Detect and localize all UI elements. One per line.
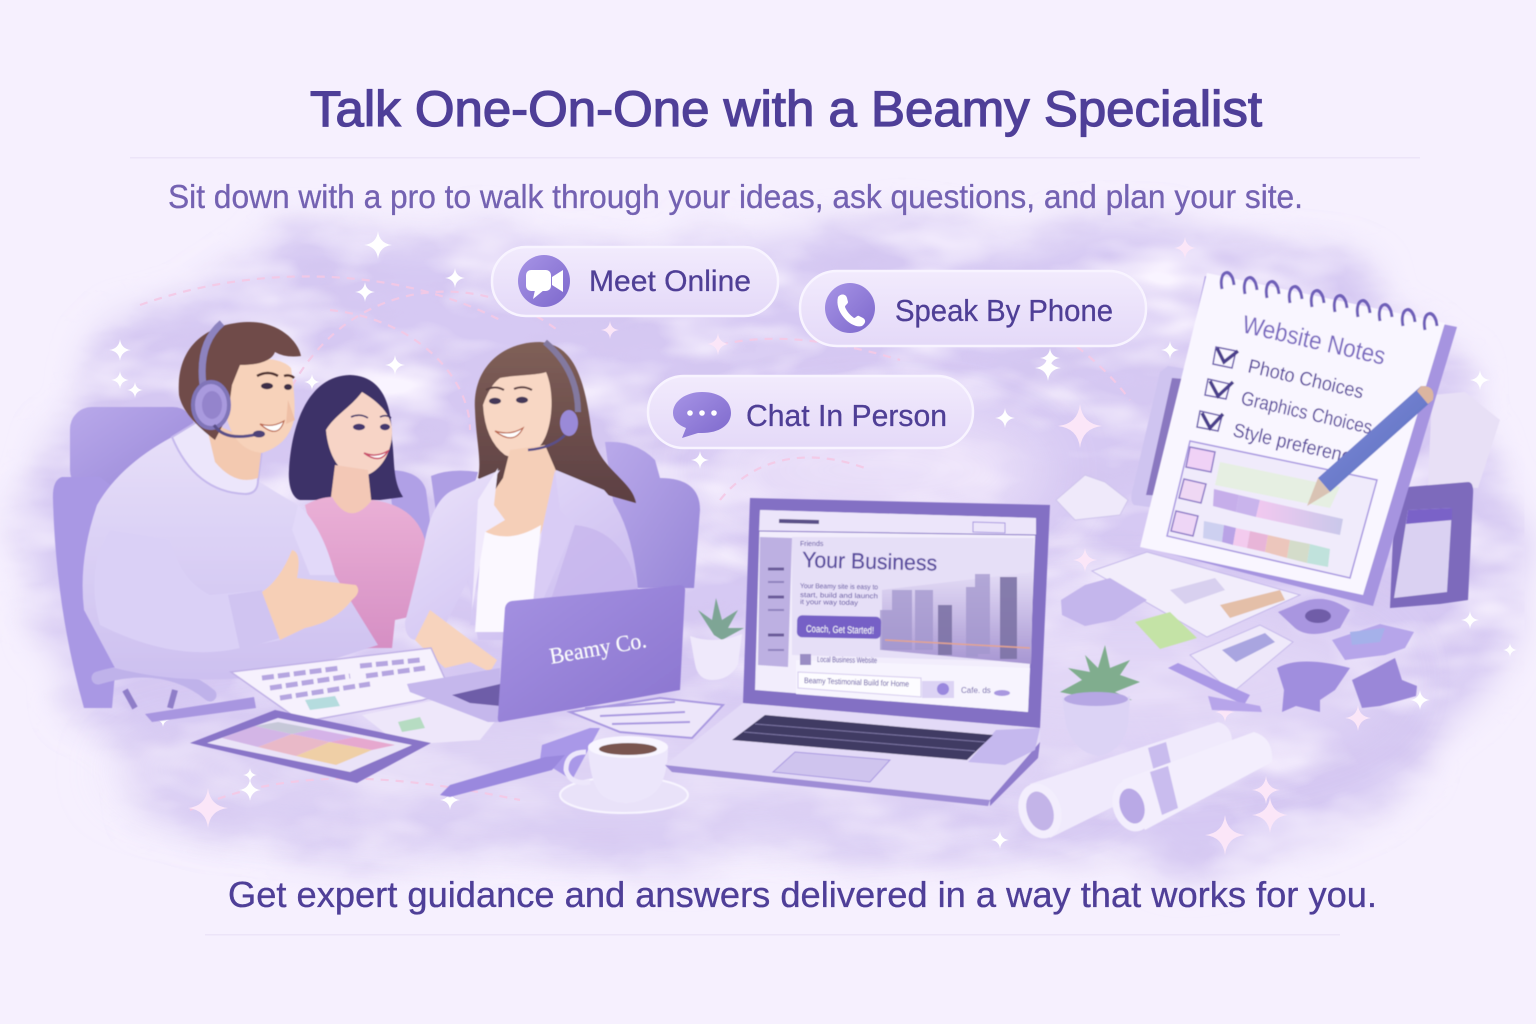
coffee cup bbox=[560, 736, 688, 813]
pill: Speak By Phone: Speak By Phone bbox=[895, 293, 1113, 328]
icon: video camera bbox=[518, 255, 570, 307]
closing line: Get expert guidance and answers delivered in a way that works for you. bbox=[228, 874, 1377, 915]
watercolor cloud bbox=[35, 240, 1505, 850]
tablet with color swatches bbox=[190, 710, 431, 783]
website on screen: Local Business Website bbox=[817, 655, 877, 665]
website on screen: it your way today bbox=[800, 599, 859, 607]
website on screen: start, build and launch bbox=[800, 592, 878, 600]
checklist: Graphics Choices bbox=[1239, 387, 1375, 439]
pill: Chat In Person bbox=[648, 376, 973, 448]
pill: Meet Online: Meet Online bbox=[589, 265, 751, 298]
person: specialist with headset bbox=[405, 342, 638, 672]
chairs bbox=[53, 407, 700, 708]
decorative dashed arcs bbox=[140, 276, 1130, 810]
central laptop bbox=[665, 498, 1050, 806]
website on screen: Your Business bbox=[802, 547, 937, 576]
arm and open hand bbox=[94, 530, 358, 652]
website on screen: Coach, Get Started! bbox=[806, 624, 874, 637]
person: male client with headset bbox=[83, 322, 378, 680]
puzzle pieces bbox=[1277, 599, 1417, 712]
pill: Chat In Person: Chat In Person bbox=[746, 398, 947, 433]
background tablets and papers bbox=[1056, 366, 1500, 608]
subtitle: Sit down with a pro to walk through your ideas, ask questions, and plan your site. bbox=[168, 178, 1303, 215]
rolled plans bbox=[1011, 722, 1272, 844]
checklist: Photo Choices bbox=[1246, 355, 1366, 403]
checklist bbox=[1197, 347, 1375, 468]
icon: phone bbox=[825, 283, 875, 333]
swatch panel bbox=[1167, 441, 1377, 578]
purple Beamy laptop: Beamy Co. bbox=[548, 627, 648, 669]
desk left papers and tablet bbox=[145, 648, 500, 783]
website on screen: Beamy Testimonial Build for Home bbox=[804, 676, 910, 689]
desk papers right bbox=[1061, 552, 1300, 712]
website on screen: Friends bbox=[800, 541, 824, 548]
checklist: Style preferenc bbox=[1231, 419, 1353, 468]
website on screen: Your Beamy site is easy to bbox=[800, 583, 878, 591]
small plant bbox=[690, 598, 744, 680]
website notes notepad bbox=[1140, 273, 1457, 606]
purple Beamy laptop bbox=[407, 585, 685, 722]
desk plant bbox=[1060, 645, 1140, 756]
pill: Speak By Phone bbox=[800, 271, 1146, 346]
website on screen: Cafe. ds bbox=[961, 686, 991, 695]
pen bbox=[1307, 386, 1434, 506]
person: woman client bbox=[289, 375, 434, 648]
website notes notepad: Website Notes bbox=[1240, 311, 1388, 371]
pill: Meet Online bbox=[492, 247, 778, 316]
spiral binding bbox=[1221, 273, 1437, 330]
document and pen on desk bbox=[440, 698, 723, 797]
sparkles bbox=[53, 231, 1517, 855]
title: Talk One-On-One with a Beamy Specialist bbox=[310, 81, 1262, 137]
armrest bbox=[98, 671, 210, 708]
icon: chat bubble bbox=[673, 392, 731, 438]
website on screen bbox=[758, 510, 1036, 712]
